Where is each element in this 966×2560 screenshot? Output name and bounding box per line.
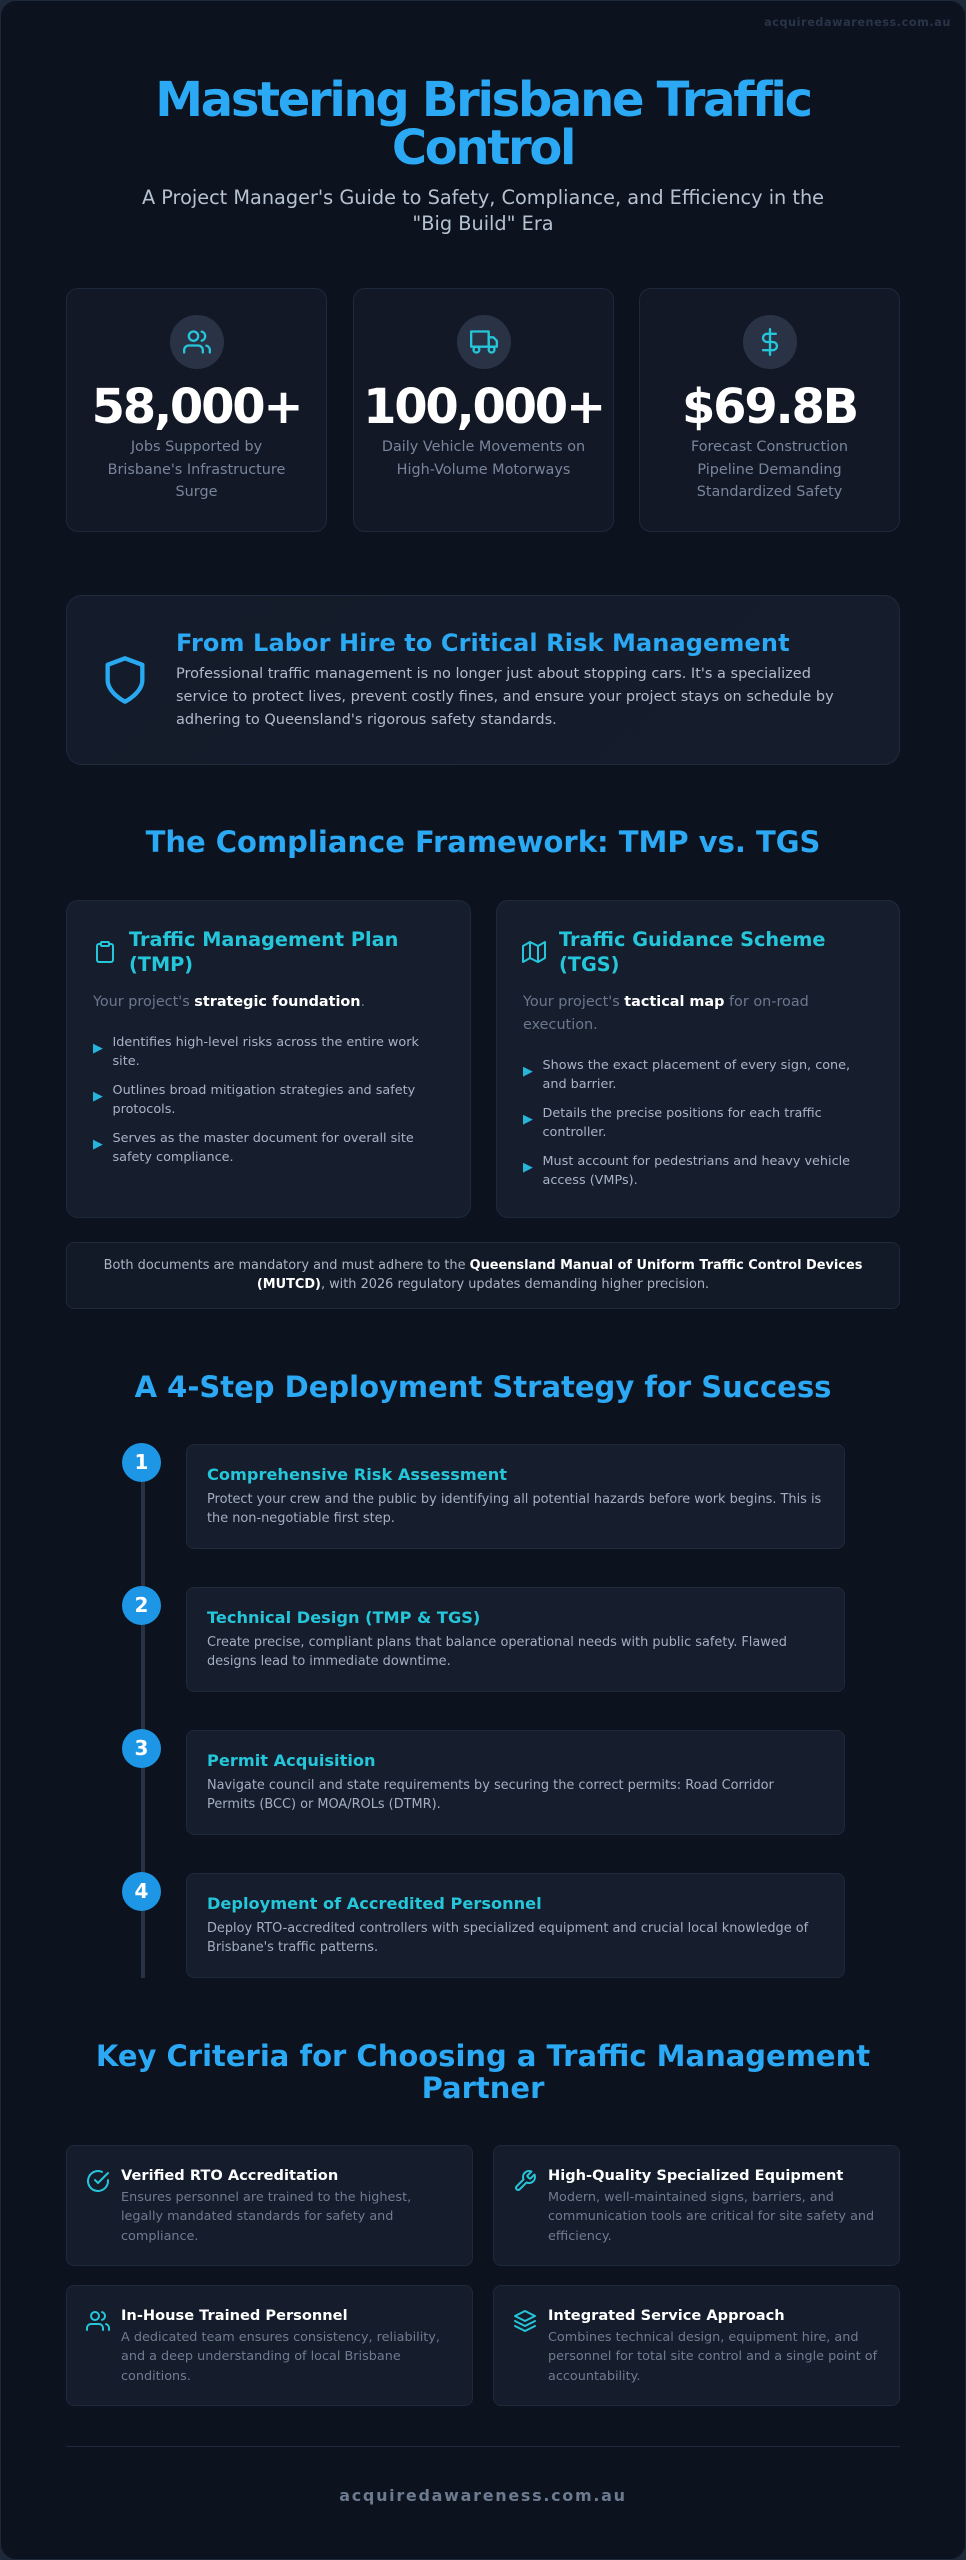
bullet: Identifies high-level risks across the entire work [112,1035,419,1050]
step title: Technical Design (TMP & TGS) [207,1608,480,1627]
stat label [108,439,285,500]
step 2 number: 2 [135,1593,148,1617]
icon: shield [106,656,144,704]
criterion text: personnel for total site control and a single point of [548,2349,877,2364]
card title: Traffic Management Plan [129,928,398,951]
stat label: Surge [176,484,217,500]
note: MUTCD: Both documents are mandatory and must adhere to the Queensland Manual of Uniform Traffic Control Devices [104,1258,862,1273]
criterion text [548,2330,878,2384]
icon: clipboard [96,941,114,963]
criterion text: and a deep understanding of local Brisbane [121,2349,401,2364]
step text [207,1921,808,1955]
heading: key criteria: Key Criteria for Choosing a Traffic Management [96,2039,870,2073]
criterion title: In-House Trained Personnel [121,2307,348,2324]
panel: TGS [496,900,900,1218]
bullet: access (VMPs). [542,1173,638,1188]
step 1 number: 1 [135,1450,148,1474]
card intro: Your project's tactical map for on-road [523,994,809,1010]
step text [207,1635,787,1669]
bullet [523,1058,850,1092]
title: Mastering Brisbane Traffic [155,72,811,128]
panel: stat vehicles [353,288,614,532]
criterion text: Combines technical design, equipment hire, and [548,2330,858,2345]
bullet: ▶ [93,1137,103,1152]
stat label: High-Volume Motorways [397,462,570,478]
bullet [523,1106,822,1140]
panel: criterion equipment [493,2145,900,2266]
bullet: ▶ [523,1064,533,1079]
heading: deployment strategy: A 4-Step Deployment Strategy for Success [135,1370,831,1404]
criterion text [121,2190,411,2244]
step title: Comprehensive Risk Assessment [207,1465,507,1484]
stat label: Jobs Supported by [131,439,262,455]
criterion text: conditions. [121,2369,191,2384]
card title: (TGS) [559,953,620,976]
panel: criterion RTO [66,2145,473,2266]
step text [207,1778,774,1812]
step text: Navigate council and state requirements by securing the correct permits: Road Corridor [207,1778,774,1793]
bullet: Details the precise positions for each traffic [542,1106,822,1121]
step text: designs lead to immediate downtime. [207,1654,451,1669]
step text: Permits (BCC) or MOA/ROLs (DTMR). [207,1797,441,1812]
bullet: Shows the exact placement of every sign, cone, [542,1058,850,1073]
icon: map [522,941,546,963]
stat label [691,439,848,500]
card intro [523,994,809,1033]
step 3 card [186,1730,845,1835]
bullet: protocols. [112,1102,175,1117]
icon: truck [457,315,511,369]
bullet: ▶ [523,1160,533,1175]
step 3 number: 3 [135,1736,148,1760]
criterion text: accountability. [548,2369,640,2384]
step 3 number [122,1729,161,1768]
icon: dollar [743,315,797,369]
bullet: controller. [542,1125,606,1140]
title [155,72,811,176]
criterion title: Verified RTO Accreditation [121,2167,338,2184]
criterion text [121,2330,440,2384]
criterion text: A dedicated team ensures consistency, reliability, [121,2330,440,2345]
icon: layers [514,2310,536,2332]
heading: key criteria [96,2039,870,2105]
card title: (TMP) [129,953,193,976]
criterion title: High-Quality Specialized Equipment [548,2167,843,2184]
callout text: adhering to Queensland's rigorous safety standards. [176,712,557,728]
watermark: acquiredawareness.com.au [764,16,951,29]
callout text: Professional traffic management is no longer just about stopping cars. It's a specialized [176,666,811,682]
step text: Deploy RTO-accredited controllers with specialized equipment and crucial local knowledge of [207,1921,808,1936]
criterion title: Integrated Service Approach [548,2307,785,2324]
bullet: Must account for pedestrians and heavy vehicle [542,1154,850,1169]
heading: key criteria: Partner [422,2071,544,2105]
step 4 number: 4 [135,1879,148,1903]
criterion text: legally mandated standards for safety and [121,2209,393,2224]
icon: users [170,315,224,369]
subtitle: "Big Build" Era [412,212,554,235]
bullet: and barrier. [542,1077,616,1092]
step title: Permit Acquisition [207,1751,376,1770]
callout text [176,666,834,728]
criterion text: Ensures personnel are trained to the highest, [121,2190,411,2205]
callout heading: From Labor Hire to Critical Risk Management [176,629,790,657]
note: MUTCD [66,1242,900,1309]
stat label: Brisbane's Infrastructure [108,462,285,478]
step title: Deployment of Accredited Personnel [207,1894,542,1913]
step 2 card [186,1587,845,1692]
criterion text: communication tools are critical for site safety and [548,2209,874,2224]
step text: Brisbane's traffic patterns. [207,1940,378,1955]
panel: stat jobs [66,288,327,532]
criterion text [548,2190,874,2244]
stat label [382,439,585,478]
bullet: Serves as the master document for overall site [112,1131,414,1146]
bullet [523,1154,850,1188]
bullet: safety compliance. [112,1150,234,1165]
step 2 number [122,1586,161,1625]
step 4 card [186,1873,845,1978]
panel: criterion integrated [493,2285,900,2406]
bullet: site. [112,1054,140,1069]
stat label: Forecast Construction [691,439,848,455]
bullet [93,1131,414,1165]
stat number: 58,000+ [92,379,301,435]
step text: Create precise, compliant plans that balance operational needs with public safety. Flawed [207,1635,787,1650]
callout text: service to protect lives, prevent costly fines, and ensure your project stays on schedule by [176,689,834,705]
icon: check circle [87,2170,109,2192]
step 1 number [122,1443,161,1482]
bullet [93,1035,419,1069]
criterion text: Modern, well-maintained signs, barriers, and [548,2190,834,2205]
footer: acquiredawareness.com.au [339,2486,627,2505]
criterion text: efficiency. [548,2229,612,2244]
bullet: ▶ [93,1041,103,1056]
stat label: Daily Vehicle Movements on [382,439,585,455]
title: Control [392,120,574,176]
bullet: Outlines broad mitigation strategies and safety [112,1083,415,1098]
icon: users [86,2311,110,2331]
criterion text: compliance. [121,2229,198,2244]
card title [559,928,825,976]
bullet: ▶ [93,1089,103,1104]
subtitle: A Project Manager's Guide to Safety, Compliance, and Efficiency in the [142,186,824,208]
timeline line [141,1481,145,1978]
step 4 number [122,1872,161,1911]
card intro: execution. [523,1017,598,1033]
stat label: Standardized Safety [697,484,842,500]
icon: wrench [515,2170,536,2191]
card title: Traffic Guidance Scheme [559,928,825,951]
panel: TMP [66,900,471,1218]
note: MUTCD: (MUTCD), with 2026 regulatory updates demanding higher precision. [257,1277,709,1292]
panel: risk management callout [66,595,900,765]
step text: the non-negotiable first step. [207,1511,395,1526]
card title [129,928,398,976]
card intro: Your project's strategic foundation. [93,994,365,1010]
heading: compliance framework: The Compliance Framework: TMP vs. TGS [146,825,820,859]
step text: Protect your crew and the public by identifying all potential hazards before work begins. This is [207,1492,821,1507]
bullet: ▶ [523,1112,533,1127]
panel: stat pipeline [639,288,900,532]
stat number: 100,000+ [363,379,604,435]
bullet [93,1083,415,1117]
stat number: $69.8B [682,379,857,435]
step text [207,1492,821,1526]
step 1 card [186,1444,845,1549]
stat label: Pipeline Demanding [697,462,842,478]
subtitle [142,186,824,235]
panel: criterion personnel [66,2285,473,2406]
